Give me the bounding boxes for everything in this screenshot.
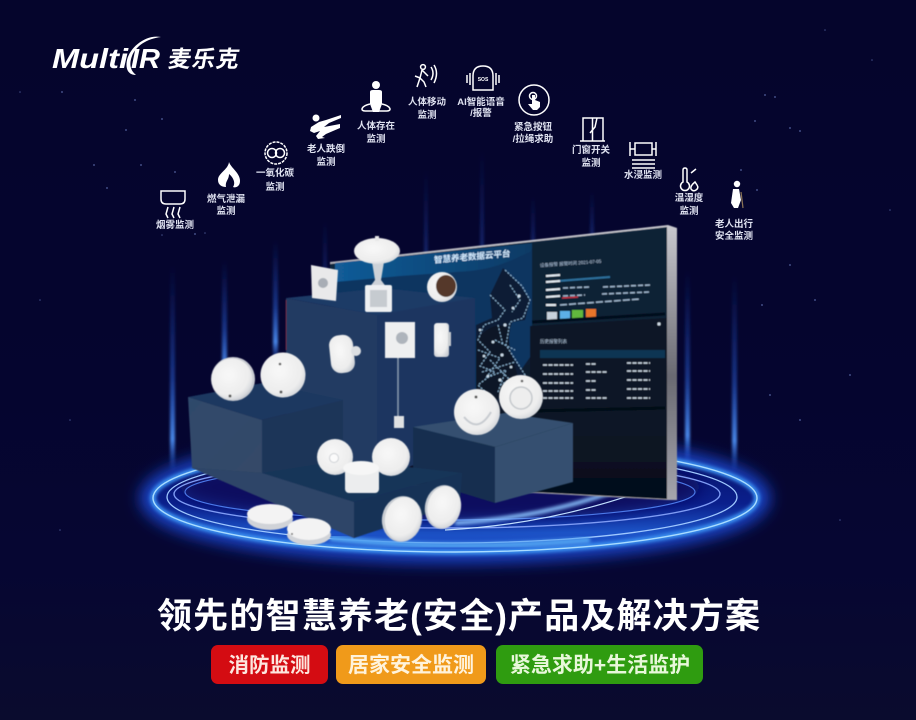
icon: gas leak monitoring [207, 162, 245, 217]
icon: AI voice alarm [457, 66, 505, 119]
device: second round sensor [260, 352, 306, 398]
monitor display with platform screen [330, 225, 677, 500]
icon: temperature and humidity monitoring: 监测 [679, 205, 699, 217]
sensor devices [211, 236, 543, 546]
left block [188, 383, 343, 475]
icon: door and window monitoring: 监测 [581, 157, 601, 169]
icon: emergency button [513, 85, 553, 145]
alarm list table: 历史报警列表 [540, 338, 567, 345]
icon: elderly fall monitoring: 老人跌倒 [307, 143, 345, 155]
icon: elderly fall monitoring [307, 114, 345, 168]
icon: human motion monitoring: 人体移动 [408, 96, 446, 108]
icon: elderly travel safety: 老人出行 [715, 218, 753, 230]
device: cylinder sensor [343, 461, 379, 493]
device: round lens sensor [427, 272, 457, 302]
screen title: 智慧养老数据云平台 [434, 248, 510, 265]
device: small button right [372, 438, 410, 476]
icon: elderly travel safety: 安全监测 [715, 230, 753, 242]
device: motion sensor [328, 334, 361, 374]
screen header band [335, 243, 535, 282]
icon: carbon monoxide monitoring: 监测 [265, 181, 285, 193]
tag: fire monitoring [211, 645, 328, 684]
icon: temperature and humidity monitoring [675, 168, 704, 217]
icon: gas leak monitoring: 燃气泄漏 [207, 193, 245, 205]
icon: carbon monoxide monitoring [256, 142, 294, 193]
monitor frame [330, 225, 677, 500]
device: front disc right [421, 482, 465, 532]
device: front disc left [378, 492, 426, 546]
tag: home safety monitoring: 居家安全监测 [348, 653, 474, 677]
device: smoke detector front [454, 389, 500, 435]
logo: MultiIR 麦乐克: IR [131, 43, 161, 74]
icon: elderly fall monitoring: 监测 [316, 156, 336, 168]
display stand blocks [188, 288, 573, 538]
icon: AI voice alarm: /报警 [470, 107, 492, 119]
screen top tabs [561, 237, 615, 253]
category tags [211, 645, 703, 684]
icon: water immersion monitoring [624, 142, 662, 181]
logo: MultiIR 麦乐克: Multi [52, 43, 129, 74]
monitoring icons arc [156, 65, 753, 242]
icon: human presence monitoring: 人体存在 [357, 120, 395, 132]
device: flat puck right [287, 518, 331, 545]
device: left round sensor [211, 357, 255, 401]
icon: temperature and humidity monitoring: 温湿度 [675, 192, 704, 204]
right block [413, 413, 573, 503]
tall block [286, 288, 475, 500]
icon: human presence monitoring [357, 81, 395, 145]
device: small button left [317, 439, 353, 475]
icon: AI voice alarm: AI智能语音 [457, 96, 505, 108]
device: flat puck left [247, 504, 293, 530]
screen top tabs: 数据总览 [564, 243, 582, 252]
status colour buttons [547, 312, 557, 321]
vertical light beams [170, 150, 737, 470]
icon: water immersion monitoring: 水浸监测 [624, 169, 662, 181]
main heading: 领先的智慧养老(安全)产品及解决方案 [157, 597, 760, 636]
patient info panel: 设备报警 报警时间 2021-07-05 [540, 258, 602, 269]
icon: smoke monitoring: 烟雾监测 [156, 219, 194, 231]
patient info panel [532, 228, 667, 326]
icon: emergency button: 紧急按钮 [514, 121, 552, 133]
monitor screen [330, 227, 667, 499]
icon: door and window monitoring [572, 118, 610, 169]
device: ceiling mounted sensor [354, 236, 400, 312]
logo: MultiIR 麦乐克: 麦乐克 [166, 46, 242, 72]
icon: smoke monitoring [156, 191, 194, 231]
screen top tabs: 用户管理 [589, 239, 607, 248]
icon: emergency button: /拉绳求助 [513, 133, 553, 145]
tag: emergency help and life monitoring: 紧急求助+生活监护 [510, 654, 690, 677]
icon: human motion monitoring [408, 65, 446, 121]
tag: emergency help and life monitoring [496, 645, 703, 684]
icon: human motion monitoring: 监测 [417, 109, 437, 121]
logo: MultiIR 麦乐克 [52, 37, 242, 75]
icon: door and window monitoring: 门窗开关 [572, 144, 610, 156]
device: smoke detector back [499, 375, 543, 419]
device: wall plate on tall block [311, 265, 338, 301]
map of China [476, 268, 530, 402]
tag: home safety monitoring [336, 645, 486, 684]
icon: elderly travel safety [715, 181, 753, 242]
device: door sensor [434, 323, 451, 357]
map sea area [335, 245, 540, 400]
star field [19, 29, 891, 531]
tag: fire monitoring: 消防监测 [228, 654, 310, 677]
icon: gas leak monitoring: 监测 [216, 205, 236, 217]
icon: AI voice alarm: SOS [478, 77, 489, 83]
icon: human presence monitoring: 监测 [366, 133, 386, 145]
device: wall switch with pull cord [385, 322, 415, 428]
front low block [192, 460, 462, 538]
light rings platform [149, 442, 761, 554]
alarm list table [530, 314, 667, 412]
icon: carbon monoxide monitoring: 一氧化碳 [256, 167, 294, 179]
